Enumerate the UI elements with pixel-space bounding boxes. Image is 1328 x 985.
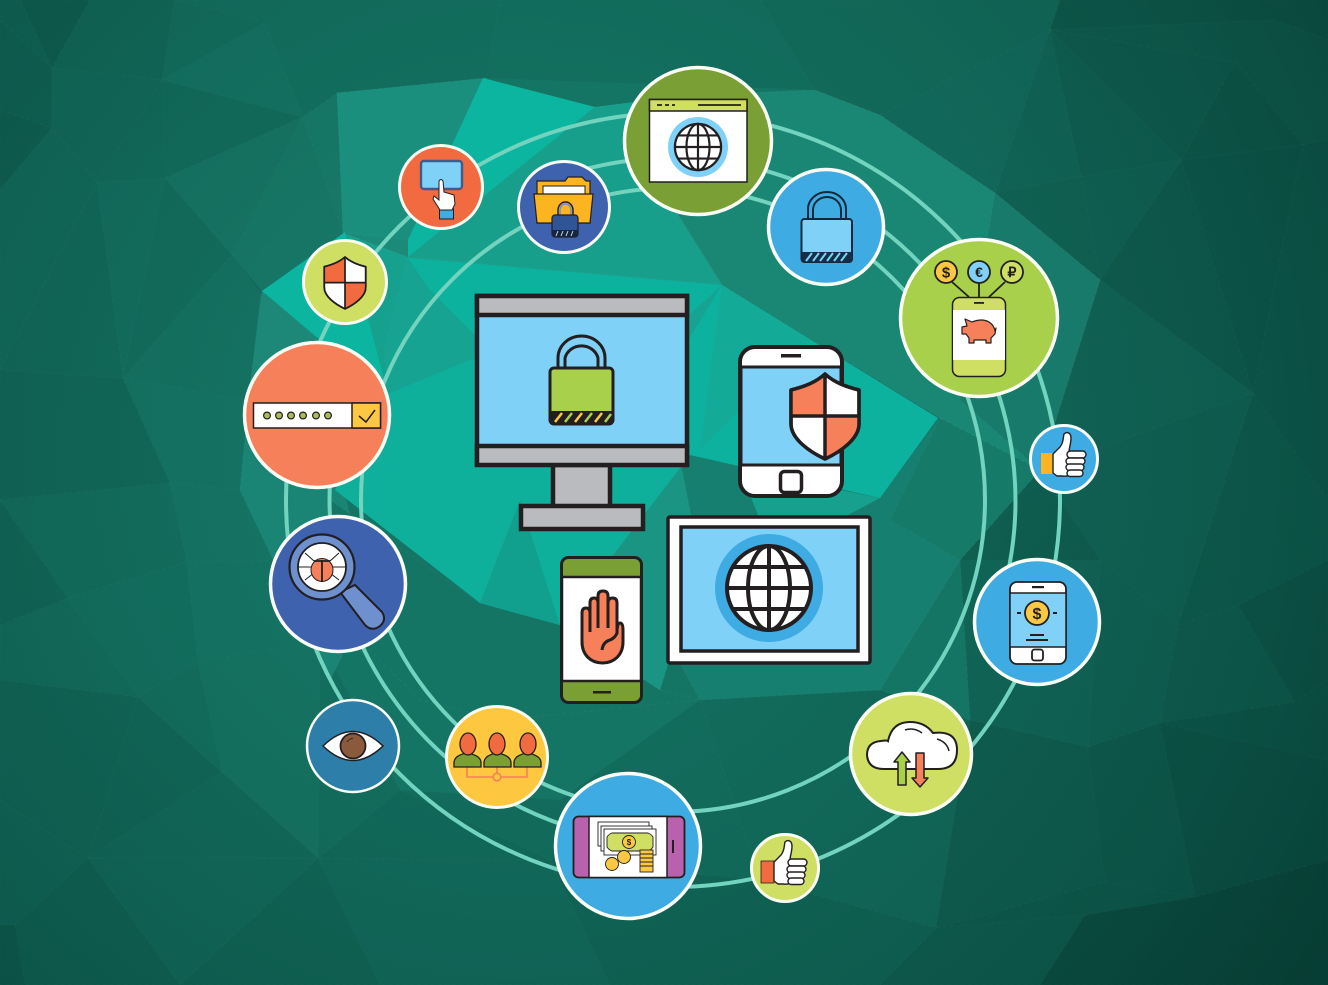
- icon: ruble coin: [1001, 261, 1023, 283]
- central smartphone with shield: [740, 347, 859, 496]
- icon circle: browser window with globe: [624, 68, 772, 214]
- icon circle: magnifier with bug: [270, 516, 406, 652]
- icon circle: three people network: [446, 706, 548, 808]
- icon circle: thumbs up on blue: [1030, 426, 1098, 492]
- icon circle: cloud sync: [850, 694, 972, 814]
- icon circle: thumbs up on lime: [752, 834, 818, 902]
- icon circle: eye: [307, 700, 399, 792]
- icon: stop hand: [582, 591, 623, 663]
- icon circle: phone with money: $: [627, 838, 632, 847]
- icon circle: phone with dollar coin: [974, 560, 1100, 684]
- icon: dollar coin: [935, 261, 957, 283]
- icon circle: touch screen: [400, 146, 482, 228]
- icon: piggy bank: [962, 319, 996, 343]
- orbit rings: [286, 113, 1060, 887]
- central monitor with padlock: [477, 296, 687, 529]
- icon circle: blue padlock: [768, 170, 884, 284]
- central underlay: [240, 78, 1040, 800]
- icon circle: phone with money: [556, 774, 700, 918]
- bright teal facets: [262, 78, 938, 625]
- icon: orange and white shield: [791, 374, 859, 459]
- icon: ruble coin: ₽: [1008, 264, 1017, 280]
- icon: dollar coin: $: [942, 264, 951, 282]
- central phone with stop hand: [562, 558, 642, 702]
- icon circle: locked folder: [518, 162, 610, 252]
- money pile: [598, 822, 656, 872]
- icon circle: password field: [244, 342, 390, 488]
- icon circle: small shield: [304, 240, 386, 324]
- lighter central facets: [240, 78, 1100, 720]
- icon circle: phone with dollar coin: $: [1033, 606, 1042, 623]
- icon: euro coin: [968, 261, 990, 283]
- icon: green padlock: [550, 336, 613, 424]
- central tablet with globe: [668, 517, 870, 663]
- icon: globe: [727, 546, 811, 630]
- icon: euro coin: €: [975, 264, 983, 280]
- icon circle: phone with piggy bank and currencies: [900, 240, 1058, 396]
